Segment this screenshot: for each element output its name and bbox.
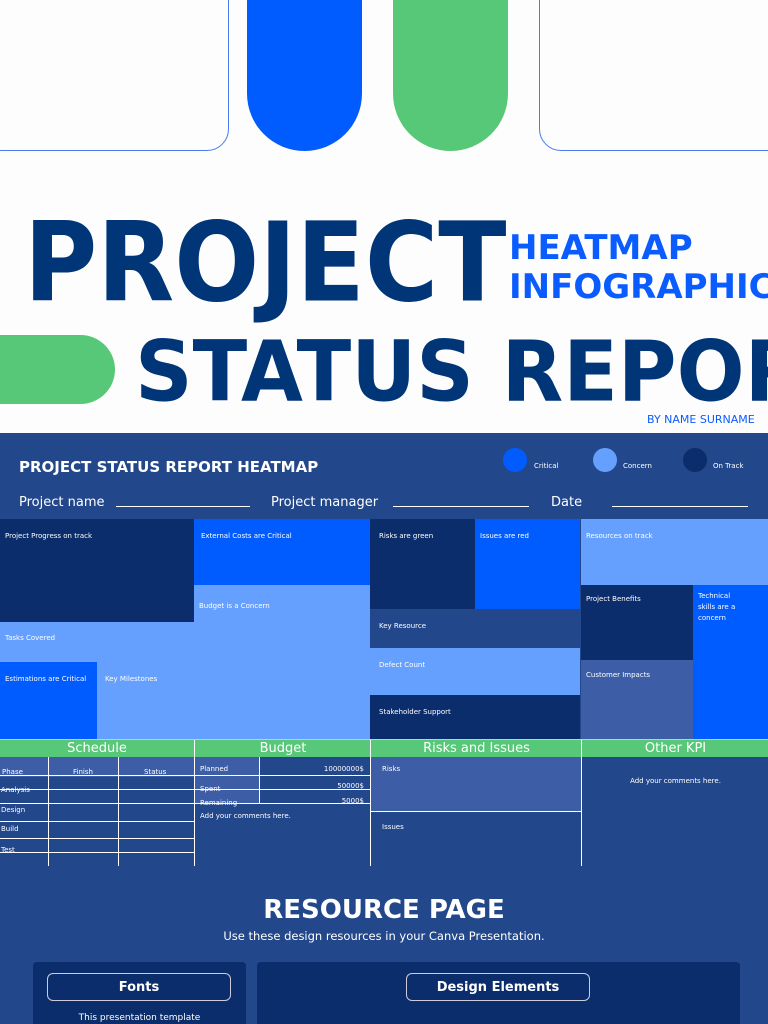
cell: key resource <box>370 609 580 648</box>
decor: green pill <box>393 0 508 151</box>
schedule table: Schedule <box>67 741 127 756</box>
budget table: Add your comments here. <box>200 812 291 820</box>
resource page heading: RESOURCE PAGE <box>263 895 505 925</box>
cell: resources: Resources on track <box>586 532 653 540</box>
heading: PROJECT STATUS REPORT HEATMAP <box>19 458 318 476</box>
panel: heatmap report <box>0 433 768 1024</box>
budget table: Budget <box>260 741 306 756</box>
decor: right outlined box <box>539 0 768 151</box>
legend: Critical <box>534 462 558 470</box>
panel: fonts: Fonts <box>119 980 159 995</box>
byline: BY NAME SURNAME <box>647 413 755 426</box>
schedule table: Finish <box>73 768 93 776</box>
title: PROJECT: PROJECT <box>24 198 506 327</box>
risks and issues table: Risks <box>382 765 400 773</box>
budget table: 5000$ <box>342 797 364 805</box>
cell: project benefits: Project Benefits <box>586 595 641 603</box>
cell: customer impacts <box>581 660 693 739</box>
budget table <box>194 740 370 866</box>
table section <box>0 739 768 866</box>
risks and issues table: Issues <box>382 823 404 831</box>
cell: project benefits <box>581 585 693 660</box>
form fields: Project name <box>19 495 104 510</box>
cell: stakeholder <box>370 695 580 739</box>
schedule table: Test <box>1 846 15 854</box>
cell: key resource: Key Resource <box>379 622 426 630</box>
schedule table: Analysis <box>1 786 30 794</box>
cell: tasks covered: Tasks Covered <box>5 634 55 642</box>
cell: estimations: Estimations are Critical <box>5 675 86 683</box>
schedule table: Status <box>144 768 166 776</box>
cell: project progress: Project Progress on track <box>5 532 92 540</box>
legend <box>503 448 744 472</box>
risks and issues table <box>370 740 581 866</box>
panel: design elements: Design Elements <box>437 980 559 995</box>
cell: defect count: Defect Count <box>379 661 425 669</box>
cell: estimations <box>0 662 97 739</box>
panel: fonts <box>33 962 246 1024</box>
form fields: Project manager <box>271 495 378 510</box>
cell: technical skills <box>693 585 768 739</box>
cell: resources <box>581 519 768 585</box>
legend: Concern <box>623 462 652 470</box>
cell: stakeholder: Stakeholder Support <box>379 708 451 716</box>
cell: external costs <box>194 519 370 585</box>
cell: external costs: External Costs are Critical <box>201 532 292 540</box>
legend: On Track <box>713 462 744 470</box>
cell: technical skills: Technical skills are a concern <box>698 592 735 622</box>
budget table: Remaining <box>200 799 237 807</box>
other kpi <box>581 740 768 866</box>
risks and issues table: Risks and Issues <box>423 741 530 756</box>
schedule table: Build <box>1 825 19 833</box>
cell: defect count <box>370 648 580 695</box>
decor: left outlined box <box>0 0 229 151</box>
decor: green left pill <box>0 335 115 404</box>
cell: key milestones: Key Milestones <box>105 675 157 683</box>
other kpi: Add your comments here. <box>630 777 721 785</box>
schedule table <box>0 740 194 866</box>
panel: fonts: This presentation template <box>79 1013 200 1023</box>
budget table: Spent <box>200 785 220 793</box>
cell: issues red <box>475 519 580 609</box>
schedule table: Design <box>1 806 25 814</box>
cell: risks green: Risks are green <box>379 532 433 540</box>
budget table: 10000000$ <box>324 765 364 773</box>
form fields <box>19 495 748 510</box>
cell: issues red: Issues are red <box>480 532 529 540</box>
subtitle: heatmap infographic: INFOGRAPHIC <box>509 267 768 307</box>
other kpi: Other KPI <box>645 741 706 756</box>
panel: design elements <box>257 962 740 1024</box>
resource page heading <box>223 895 545 943</box>
form fields: Date <box>551 495 582 510</box>
resource page heading: Use these design resources in your Canva Presentation. <box>223 929 545 943</box>
decor: blue pill <box>247 0 362 151</box>
schedule table: Phase <box>2 768 23 776</box>
cell: budget concern: Budget is a Concern <box>199 602 270 610</box>
cell: project progress <box>0 519 194 622</box>
subtitle: heatmap infographic <box>509 229 768 307</box>
subtitle: heatmap infographic: HEATMAP <box>509 229 693 268</box>
budget table: 50000$ <box>337 782 364 790</box>
heatmap grid <box>0 519 768 739</box>
cell: risks green <box>370 519 475 609</box>
budget table: Planned <box>200 765 228 773</box>
cell: customer impacts: Customer Impacts <box>586 671 650 679</box>
